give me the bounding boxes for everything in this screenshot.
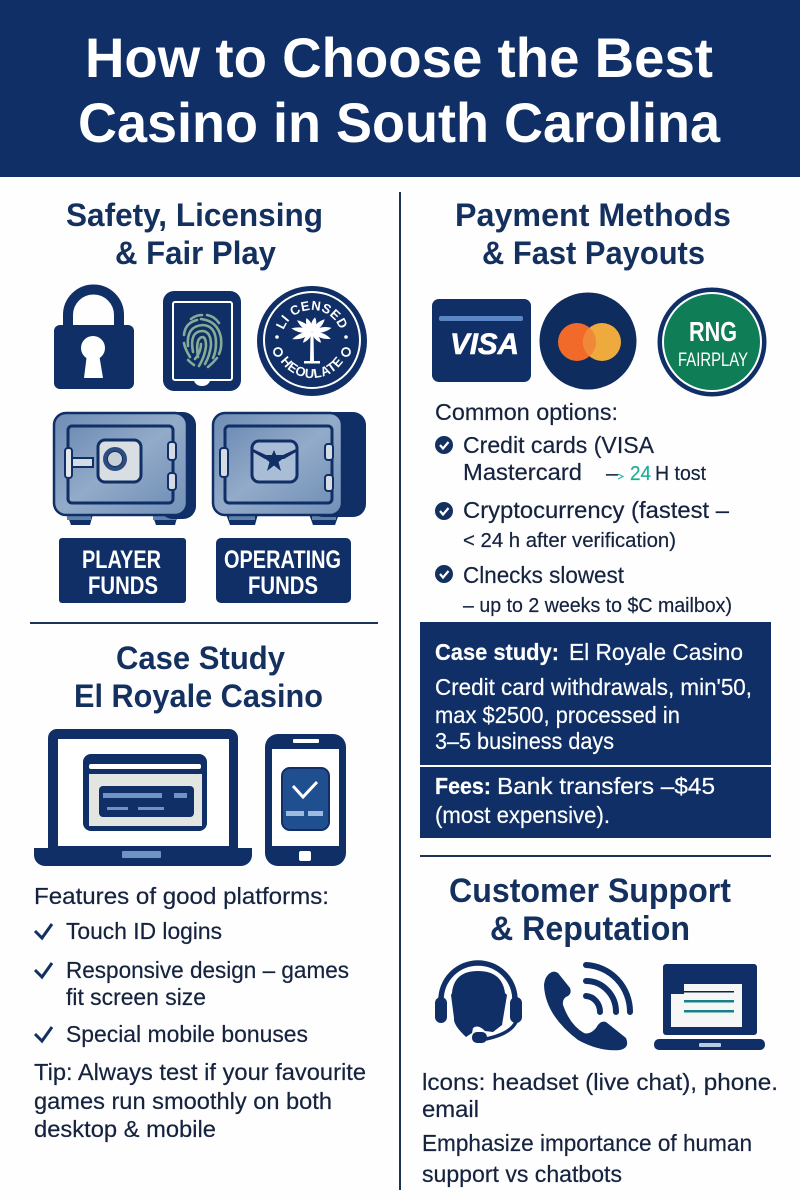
text: features of good platforms: fit screen size <box>66 984 206 1010</box>
text: common options: – up to 2 weeks to $C mailbox) <box>463 595 732 617</box>
text: support notes: email <box>422 1096 479 1122</box>
icon: licensed badge <box>257 286 367 396</box>
text: features of good platforms: Touch ID logins <box>66 918 222 944</box>
label: player funds: PLAYER <box>82 546 161 574</box>
panel: customer support and reputation <box>422 872 778 1187</box>
panel: safety, licensing and fair play <box>52 197 367 603</box>
heading: payment methods <box>455 197 731 271</box>
text: features of good platforms <box>34 883 349 1047</box>
heading: case study: Case Study <box>116 640 285 676</box>
icon: fingerprint tablet <box>163 291 241 391</box>
heading: customer support <box>449 872 731 948</box>
icon: phone <box>544 965 630 1050</box>
icon: check <box>35 1027 52 1041</box>
callout: case study el royale casino: Case study: <box>435 639 559 665</box>
heading: case study <box>74 640 323 714</box>
icon: check badge <box>435 502 453 520</box>
text: tip: games run smoothly on both <box>34 1088 332 1114</box>
text: common options: Clnecks slowest <box>463 562 625 588</box>
heading: customer support: Customer Support <box>449 872 731 910</box>
callout: case study el royale casino: Credit card withdrawals, min'50, <box>435 674 752 700</box>
icon: laptop with card form <box>34 729 252 866</box>
title: Casino in South Carolina <box>78 91 721 154</box>
icon: check badge <box>435 436 453 454</box>
icon: rng fairplay badge: FAIRPLAY <box>678 350 748 371</box>
text: common options: 24 <box>630 463 651 485</box>
text: common options: Credit cards (VISA <box>463 432 655 458</box>
text: common options: – <box>606 463 619 485</box>
icon: rng fairplay badge <box>658 288 766 396</box>
icon: padlock <box>54 290 134 389</box>
text: features of good platforms: Features of good platforms: <box>34 883 329 909</box>
text: tip <box>34 1059 366 1142</box>
heading: safety: Safety, Licensing <box>66 197 323 233</box>
title: How to Choose the Best <box>85 26 713 89</box>
label: operating funds: OPERATING <box>224 546 341 574</box>
icon: licensed badge: HEOULATE <box>280 356 344 378</box>
callout: case study el royale casino <box>420 622 771 838</box>
text: common options: Cryptocurrency (fastest – <box>463 497 729 523</box>
icon: headset <box>435 963 522 1043</box>
text: common options: < 24 h after verification) <box>463 530 676 552</box>
text: features of good platforms: Responsive design – games <box>66 957 349 983</box>
icon: check badge <box>435 565 453 583</box>
text: common options: Mastercard <box>463 459 582 485</box>
text: support notes: support vs chatbots <box>422 1161 622 1187</box>
text: tip: Tip: Always test if your favourite <box>34 1059 366 1085</box>
icon: licensed badge: LI CENSED <box>276 300 346 330</box>
icon: visa card: VISA <box>450 328 519 361</box>
callout: case study el royale casino: Bank transfers –$45 <box>497 773 715 799</box>
callout: case study el royale casino: max $2500, processed in <box>435 702 680 728</box>
text: support notes: Emphasize importance of human <box>422 1130 752 1156</box>
icon: check <box>35 924 52 938</box>
icon: smartphone <box>265 734 346 866</box>
icon: player funds safe <box>54 412 196 525</box>
heading: safety: & Fair Play <box>115 235 276 271</box>
text: common options: H tost <box>655 463 706 485</box>
title <box>78 26 721 154</box>
panel: case study el royale casino <box>34 640 366 1142</box>
text: tip: desktop & mobile <box>34 1116 216 1142</box>
icon: operating funds safe <box>213 412 366 525</box>
heading: payment methods: & Fast Payouts <box>482 235 705 271</box>
icon: laptop with email <box>654 964 765 1050</box>
callout: case study el royale casino: (most expensive). <box>435 802 610 828</box>
callout: case study el royale casino: Fees: <box>435 773 491 799</box>
text: features of good platforms: Special mobile bonuses <box>66 1021 308 1047</box>
heading: safety <box>66 197 323 271</box>
icon: rng fairplay badge: RNG <box>689 316 737 347</box>
heading: case study: El Royale Casino <box>74 678 323 714</box>
callout: case study el royale casino: 3–5 business days <box>435 728 614 754</box>
text: common options: Common options: <box>435 399 618 425</box>
text: support notes: lcons: headset (live chat), phone. <box>422 1069 778 1095</box>
text: common options <box>435 399 732 617</box>
callout: case study el royale casino: El Royale Casino <box>569 639 743 665</box>
icon: mastercard <box>540 292 636 390</box>
header banner <box>0 0 800 177</box>
icon: visa card <box>432 299 531 382</box>
heading: payment methods: Payment Methods <box>455 197 731 233</box>
label: operating funds <box>216 538 351 603</box>
label: player funds: FUNDS <box>88 572 158 600</box>
text: support notes <box>422 1069 778 1187</box>
label: player funds <box>59 538 186 603</box>
icon: check <box>35 963 52 977</box>
heading: customer support: & Reputation <box>490 910 690 948</box>
label: operating funds: FUNDS <box>248 572 318 600</box>
panel: payment methods and fast payouts <box>420 197 771 838</box>
